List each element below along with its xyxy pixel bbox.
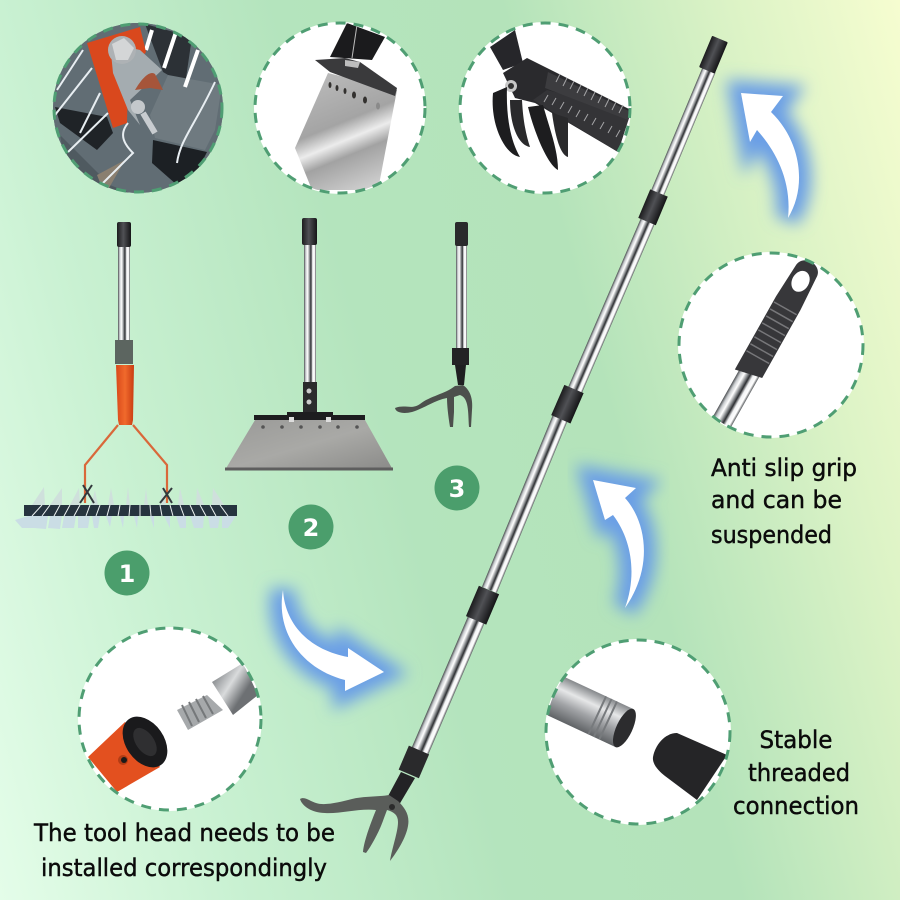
number badge 1: 1 <box>119 560 135 588</box>
steel plate and bolt <box>110 43 162 125</box>
text: tool head install: The tool head needs to be <box>33 819 335 847</box>
dark wedges <box>146 25 191 78</box>
tapered neck <box>387 772 415 805</box>
tool 1: rake <box>15 222 237 529</box>
sleeve c <box>466 586 499 625</box>
detail circle: anti slip grip <box>678 252 864 438</box>
text: tool head install: installed correspondingly <box>41 854 327 882</box>
sleeve a <box>638 189 668 225</box>
pole top grip <box>699 36 728 74</box>
detail circle: threaded connection <box>536 639 731 825</box>
detail circle: claw head <box>459 22 631 194</box>
tool 3: claw weeder <box>395 222 472 427</box>
number badge 1 <box>104 550 150 596</box>
rake wires <box>55 50 215 183</box>
detail circle: scraper <box>254 22 426 194</box>
text: threaded connection: threaded <box>748 759 850 787</box>
text: tool head install <box>33 819 335 882</box>
number badge 3: 3 <box>449 475 465 503</box>
tool 2: scraper <box>225 218 393 470</box>
arrow: bottom left, pointing right <box>282 590 384 691</box>
telescopic pole with claw head <box>300 36 728 861</box>
chrome section 4 <box>412 614 485 755</box>
text: anti slip grip: suspended <box>711 521 832 549</box>
arrow: middle, pointing up-left <box>593 480 644 608</box>
sleeve b <box>551 385 584 423</box>
chrome section 2 <box>568 213 657 393</box>
text: threaded connection: connection <box>733 792 859 820</box>
claw head <box>300 795 408 861</box>
number badge 2: 2 <box>303 514 319 542</box>
lower collar <box>399 746 429 778</box>
detail circle: rake bolt <box>50 20 230 200</box>
orange bracket <box>87 27 146 128</box>
rake tines bottom <box>15 516 236 529</box>
text: anti slip grip <box>711 454 857 549</box>
chrome section 1 <box>650 67 715 197</box>
number badge 2 <box>288 504 334 550</box>
number badge 3 <box>434 466 480 510</box>
arrow: top right, pointing up-left <box>741 93 799 218</box>
text: anti slip grip: and can be <box>711 486 842 514</box>
text: threaded connection <box>733 726 859 820</box>
text: anti slip grip: Anti slip grip <box>711 454 857 482</box>
chrome section 3 <box>482 413 568 593</box>
rake tines top <box>32 487 224 505</box>
text: threaded connection: Stable <box>760 726 832 754</box>
detail circle: tool head connector <box>78 627 262 811</box>
